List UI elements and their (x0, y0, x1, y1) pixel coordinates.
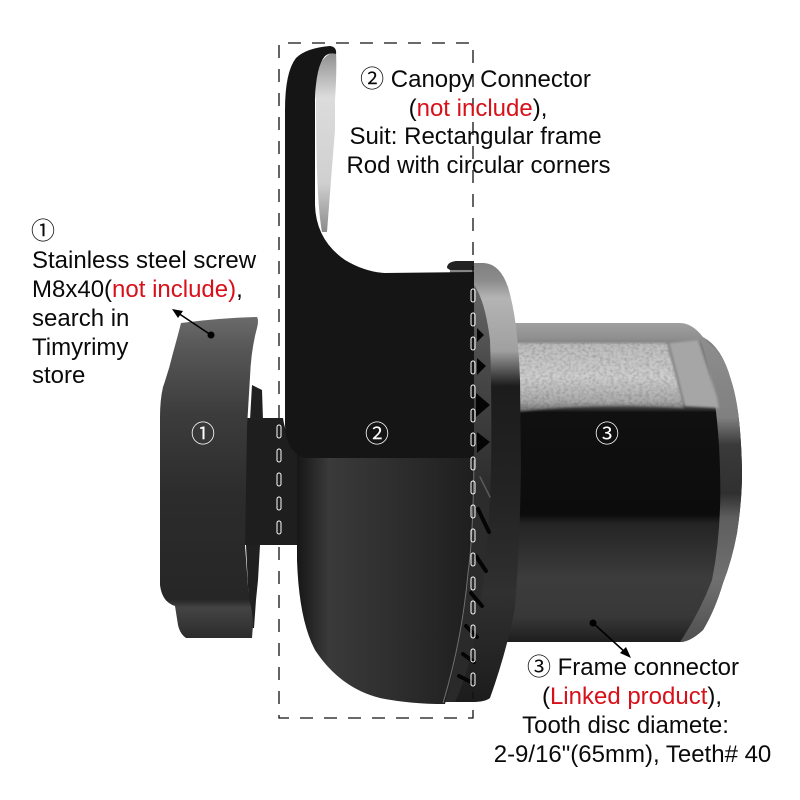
arrow: part 1 callout to knob (172, 309, 214, 338)
part 1: shaft (245, 418, 298, 545)
white dashes over dark parts (277, 289, 475, 686)
disc teeth: outlined lower teeth (459, 477, 490, 682)
callout: part 3 label: 2-9/16"(65mm), Teeth# 40 (494, 741, 771, 768)
callout: part 3 label: ③ Frame connector (527, 654, 739, 681)
callout: part 1 label (31, 218, 257, 389)
callout: part 1 label: Timyrimy (32, 334, 128, 361)
part 1: dark piece behind knob (246, 385, 263, 628)
callout: part 3 label (494, 654, 771, 768)
callout: part 2 label: (not include), (409, 95, 547, 122)
part 2: lower body (297, 450, 474, 704)
callout: part 1 label: ① (31, 218, 55, 245)
callout: part 2 label: ② Canopy Connector (360, 66, 591, 93)
callout: part 2 label (346, 66, 611, 179)
callout: part 1 label: store (32, 362, 85, 389)
product photo: canopy connector assembly (160, 46, 742, 704)
marker: part 2 on body: ② (365, 421, 389, 448)
part 2: light strip on hook (316, 52, 336, 232)
marker: part 3 on cylinder: ③ (595, 421, 619, 448)
part 2: small bolt head (447, 261, 474, 270)
callout: part 1 label: search in (32, 305, 129, 332)
callout: part 3 label: Tooth disc diamete: (522, 712, 729, 739)
part 3: frame connector cylinder (505, 323, 742, 642)
disc teeth (476, 328, 490, 453)
callout: part 2 label: Suit: Rectangular frame (349, 123, 602, 150)
part 1: knob (160, 317, 258, 638)
arrow: part 3 callout to cylinder (590, 620, 631, 658)
callout: part 1 label: Stainless steel screw (32, 247, 257, 274)
part 2: upper plate with hook (285, 46, 474, 458)
part 3: tooth disc (445, 263, 521, 702)
part 2: rim highlight (443, 460, 474, 703)
callout: part 2 label: Rod with circular corners (346, 152, 611, 179)
callout: part 1 label: M8x40(not include), (32, 276, 243, 303)
marker: part 1 on knob: ① (191, 421, 215, 448)
dashed outline around part 2 (279, 43, 473, 718)
callout: part 3 label: (Linked product), (542, 683, 722, 710)
